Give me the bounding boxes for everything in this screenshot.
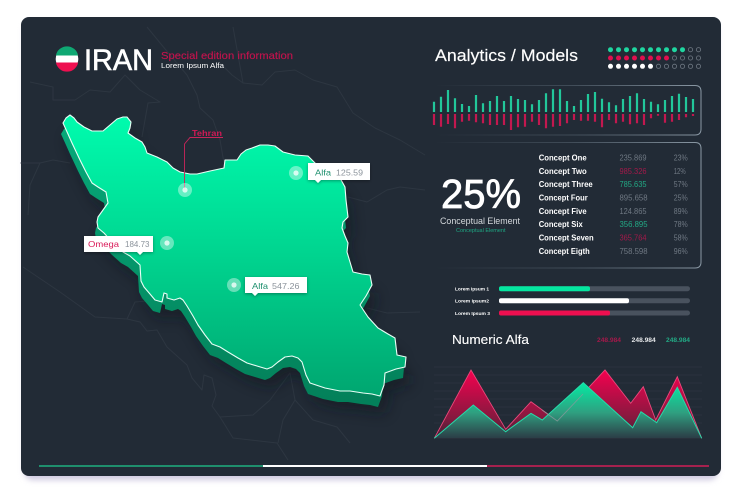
red lower bars bbox=[434, 114, 693, 130]
concept names: Concept Three bbox=[539, 180, 593, 189]
concept panel frame bbox=[435, 142, 701, 268]
map extrusion bbox=[61, 126, 404, 407]
concept names: Concept Six bbox=[539, 220, 583, 229]
concept values: 235.869 bbox=[620, 154, 647, 162]
concept names: Concept Two bbox=[539, 167, 587, 176]
callout: Alfa 547.26: Alfa bbox=[252, 281, 268, 291]
callout: Alfa 547.26: 547.26 bbox=[272, 281, 300, 291]
concept names: Concept Eigth bbox=[539, 247, 590, 256]
dot rating matrix bbox=[608, 47, 701, 69]
progress labels: Lorem Ipsum 1 bbox=[455, 286, 489, 292]
map drop shadow bbox=[67, 133, 410, 414]
concept values: 758.598 bbox=[620, 247, 648, 256]
callout: Omega 184.73: Omega bbox=[88, 239, 119, 249]
subtitle: Special edition information bbox=[161, 50, 293, 62]
concept names: Concept Five bbox=[539, 207, 587, 216]
title block bbox=[56, 44, 293, 77]
heading: Numeric Alfa: Numeric Alfa bbox=[452, 332, 530, 347]
green series bbox=[434, 383, 702, 438]
analytics bar panel bbox=[434, 86, 701, 135]
concept table bbox=[539, 154, 688, 256]
concept percentages bbox=[674, 154, 688, 256]
map of Iran bbox=[61, 115, 410, 414]
concept percentages: 57% bbox=[674, 180, 688, 189]
concept percentages: 12% bbox=[674, 167, 686, 176]
key figure: 25%: Conceptual Element bbox=[440, 216, 520, 227]
background regional map lines bbox=[20, 27, 425, 460]
concept values: 985.326 bbox=[620, 167, 647, 176]
concept values: 356.895 bbox=[620, 220, 648, 229]
area chart bbox=[434, 367, 702, 438]
key figure: 25%: Conceptual Element bbox=[456, 228, 506, 234]
callout: Alfa 125.59: 125.59 bbox=[336, 168, 363, 178]
concept names: Concept Seven bbox=[539, 234, 594, 242]
bottom tri-colour bar bbox=[39, 465, 709, 467]
callout: Tehran bbox=[178, 128, 223, 197]
callout: Omega 184.73 bbox=[84, 236, 174, 255]
numeric values: 248.984 bbox=[597, 337, 622, 344]
callout: Alfa 547.26 bbox=[227, 277, 307, 296]
callout: Alfa 125.59 bbox=[289, 163, 370, 183]
map top surface bbox=[63, 115, 406, 396]
concept percentages: 96% bbox=[674, 247, 688, 256]
numeric values bbox=[597, 337, 691, 344]
concept values: 895.658 bbox=[620, 194, 648, 202]
numeric values: 248.984 bbox=[666, 337, 691, 344]
progress labels: Lorem Ipsum2 bbox=[455, 298, 489, 304]
numeric values: 248.984 bbox=[632, 337, 656, 344]
concept values: 124.865 bbox=[620, 207, 647, 216]
callout: Alfa 125.59: Alfa bbox=[315, 168, 331, 178]
concept percentages: 78% bbox=[674, 220, 688, 229]
progress bars bbox=[455, 286, 690, 317]
heading: Analytics / Models: Analytics / Models bbox=[435, 46, 578, 65]
progress tracks bbox=[499, 286, 690, 316]
progress labels bbox=[455, 286, 490, 317]
green upper bars bbox=[434, 89, 693, 112]
red series bbox=[434, 370, 702, 438]
progress labels: Lorem Ipsum 3 bbox=[455, 311, 490, 317]
sub-subtitle: Lorem Ipsum Alfa bbox=[161, 61, 225, 70]
concept percentages: 58% bbox=[674, 234, 688, 242]
concept percentages: 23% bbox=[674, 154, 688, 162]
heading: IRAN bbox=[84, 44, 153, 77]
concept names: Concept One bbox=[539, 154, 587, 162]
icon: Iran flag bbox=[56, 46, 78, 72]
progress fills bbox=[499, 286, 590, 291]
concept names bbox=[539, 154, 594, 256]
callout: Omega 184.73: 184.73 bbox=[125, 239, 150, 249]
concept percentages: 25% bbox=[674, 194, 688, 202]
red line seen through green bbox=[542, 394, 583, 421]
callout: Tehran: Tehran bbox=[192, 128, 222, 138]
concept names: Concept Four bbox=[539, 194, 588, 202]
concept values: 365.764 bbox=[620, 234, 647, 242]
key figure: 25%: 25% bbox=[441, 171, 521, 217]
concept values: 785.635 bbox=[620, 180, 647, 189]
concept percentages: 89% bbox=[674, 207, 688, 216]
concept values bbox=[620, 154, 648, 256]
